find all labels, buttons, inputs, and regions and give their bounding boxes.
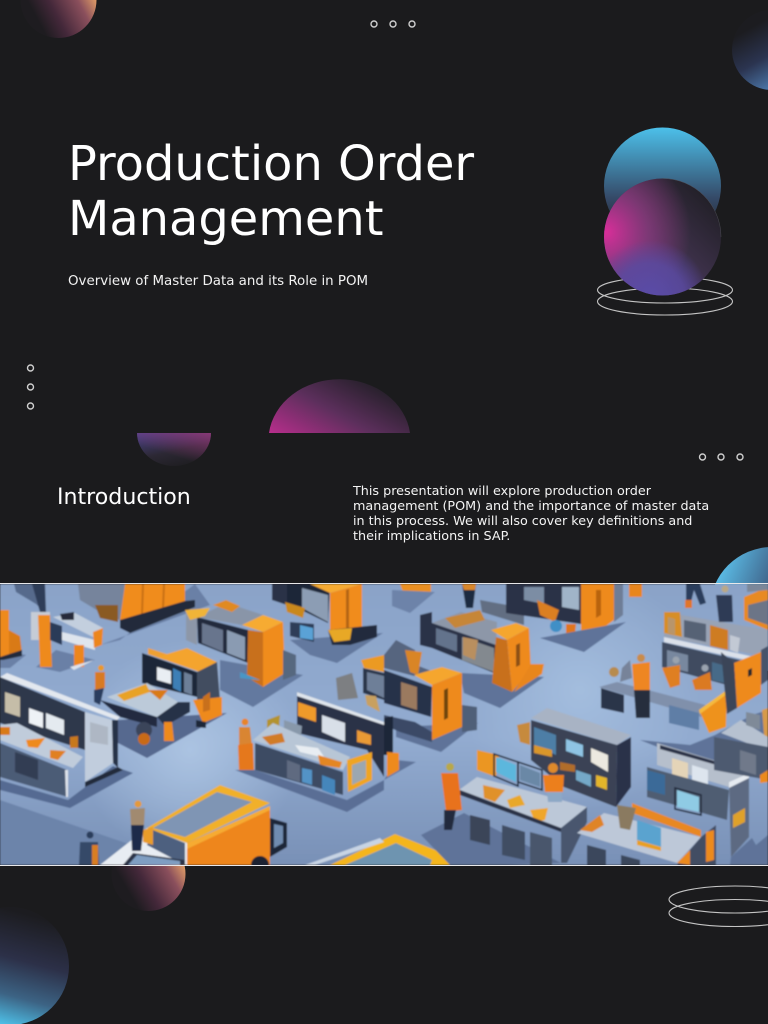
decorative half circle: magenta <box>269 379 410 433</box>
far right unit <box>714 708 768 783</box>
hero sphere group <box>598 128 732 315</box>
top-center orange cabinet <box>78 584 210 645</box>
left partial unit <box>384 716 416 780</box>
factory illustration <box>0 583 768 874</box>
screen machine <box>185 600 303 707</box>
workers at right station <box>632 654 712 718</box>
worker at center workstation <box>94 665 105 705</box>
truck workers <box>79 800 145 865</box>
intro paragraph <box>352 484 709 544</box>
top-left orange unit <box>0 584 46 668</box>
decorative rings: bottom right <box>669 886 768 926</box>
intro paragraph: their implications in SAP. <box>353 529 510 544</box>
decorative half circle: small purple <box>137 433 211 466</box>
tall control cabinet <box>517 708 631 807</box>
decorative circle: bottom left <box>0 907 69 1024</box>
intro paragraph: in this process. We will also cover key definitions and <box>353 514 692 529</box>
right-center machine edge <box>336 655 384 712</box>
top right workers and unit <box>685 584 768 630</box>
workers at long desk <box>441 763 564 830</box>
worker in orange <box>238 718 254 770</box>
decorative circle: blue above image <box>710 547 768 671</box>
decorative dots: left <box>28 365 34 409</box>
machine with tall orange tower <box>420 610 544 708</box>
intro paragraph: management (POM) and the importance of master data <box>353 499 709 514</box>
top machine with screen <box>272 584 383 663</box>
heading: introduction: Introduction <box>57 484 191 510</box>
decorative circle: below image <box>112 837 186 911</box>
title: Production Order <box>68 137 474 192</box>
left large station <box>0 673 133 808</box>
right large station <box>599 612 768 760</box>
orange cabinet center right <box>384 640 478 752</box>
center workstation <box>100 648 227 758</box>
machine top middle <box>392 584 642 652</box>
yellow truck <box>305 834 455 865</box>
decorative circle: top left <box>20 0 96 38</box>
title <box>68 137 474 247</box>
decorative dots: right <box>700 454 743 460</box>
subtitle: Overview of Master Data and its Role in POM <box>68 274 368 289</box>
center-left station <box>235 692 384 812</box>
title: Management <box>68 192 383 247</box>
lower right station <box>577 743 768 865</box>
orange truck <box>100 785 287 874</box>
desk with orange pillars <box>31 612 103 672</box>
intro paragraph: This presentation will explore production order <box>353 484 651 499</box>
decorative circle: top right <box>732 10 768 90</box>
decorative dots: top <box>371 21 415 27</box>
long desk with monitors <box>421 750 587 865</box>
